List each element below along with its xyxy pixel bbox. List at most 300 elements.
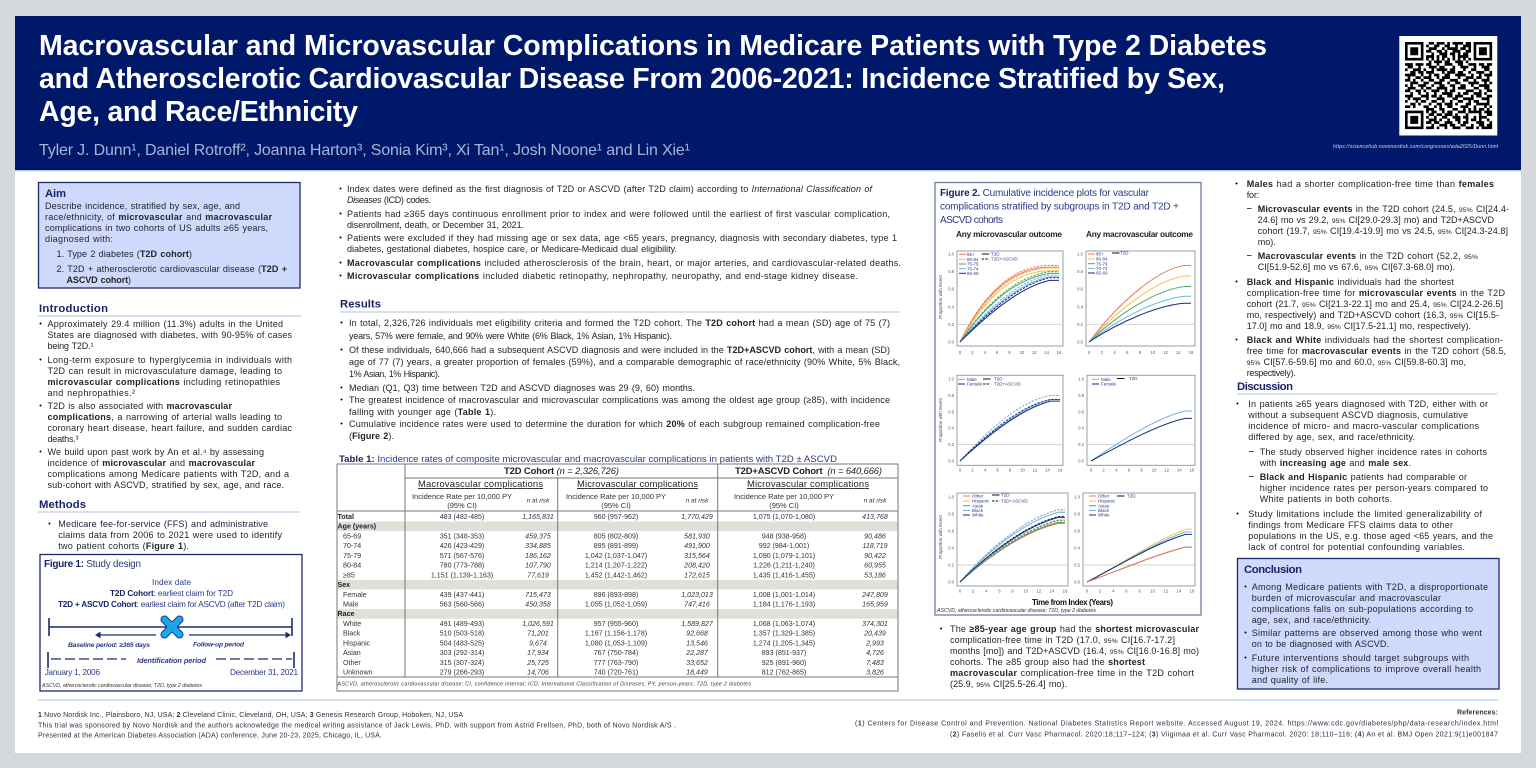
table 1: Microvascular complications — [747, 478, 869, 489]
chart: macrovascular by race: Asian — [1098, 503, 1110, 508]
table 1: T2D+ASCVD Cohort (n = 640,666) — [735, 465, 882, 476]
table 1: 571 (567-576) — [440, 552, 484, 560]
chart: microvascular by race: Hispanic — [972, 499, 990, 504]
timeline — [48, 618, 294, 668]
footer: affiliations and disclosures: 1 Novo Nordisk Inc., Plainsboro, NJ, USA; 2 Cleveland Clinic, Cleveland, OH, USA; 3 Genesis Research Group, Hoboken, NJ, USA — [38, 712, 463, 719]
chart: microvascular by age: 6 — [996, 350, 999, 355]
chart: macrovascular by sex: 0.0 — [1078, 458, 1085, 464]
panel: aim: race/ethnicity, of microvascular and macrovascular — [45, 212, 272, 222]
text block: discussion: Study limitations include the limited generalizability of — [1248, 509, 1482, 519]
table 1: 165,959 — [862, 600, 888, 608]
table 1: 4,726 — [866, 649, 884, 657]
chart: macrovascular by sex: 6 — [1128, 468, 1131, 472]
table 1: 1,090 (1,079-1,101) — [753, 552, 815, 560]
chart: macrovascular by race: 8 — [1138, 588, 1141, 594]
table 1: (95% CI) — [769, 501, 799, 510]
panel: aim: Aim — [45, 188, 66, 200]
chart: macrovascular by race: 6 — [1125, 588, 1128, 594]
title: Age, and Race/Ethnicity — [39, 96, 358, 128]
chart: macrovascular by sex: 14 — [1177, 468, 1182, 472]
chart: microvascular by age: 0.8 — [948, 269, 955, 274]
chart: microvascular by race: 0.8 — [948, 512, 955, 516]
chart: microvascular by sex: 0.6 — [948, 409, 955, 414]
heading: results: Results — [340, 298, 381, 310]
text block: results: Median (Q1, Q3) time between T2D and ASCVD diagnoses was 29 (9, 60) months. — [349, 383, 695, 393]
chart: macrovascular by age: 0.4 — [1077, 304, 1084, 309]
chart: macrovascular by race: 4 — [1112, 588, 1115, 594]
text block: results under figure 2: complication-free time in T2D (17.0, 95% CI[16.7-17.2] — [950, 635, 1175, 645]
text block: introduction: microvascular complications including retinopathies — [48, 377, 280, 387]
text block: introduction: coronary heart disease, heart failure, and sudden cardiac — [48, 423, 292, 433]
table 1: 1,435 (1,416-1,455) — [753, 571, 815, 579]
table 1: ASCVD, atherosclerotic cardiovascular disease; CI, confidence interval; ICD, International Classification of Diseases; PY, person-years; T2D, type 2 diabetes — [336, 682, 751, 688]
panel: figure 2 cumulative incidence: Figure 2. Cumulative incidence plots for vascular — [940, 188, 1150, 199]
chart: microvascular by age: 70-74 — [967, 266, 979, 271]
panel: conclusion: and quality of life. — [1252, 675, 1328, 685]
text block: methods continued: Microvascular complications included diabetic retinopathy, nephropathy, neuropathy, and end-stage kidney disease. — [347, 271, 858, 281]
panel: figure 2 cumulative incidence: complications stratified by subgroups in T2D and T2D + — [940, 202, 1179, 212]
title — [39, 30, 1267, 128]
table 1: 107,790 — [525, 562, 551, 570]
chart: microvascular by race: 2 — [972, 588, 975, 594]
table 1: 75-79 — [343, 552, 361, 560]
chart: microvascular by age: 0.0 — [948, 340, 955, 344]
table 1: 7,483 — [866, 659, 884, 667]
chart: macrovascular by race: 0.0 — [1074, 580, 1081, 584]
chart: microvascular by age: T2D — [991, 252, 1000, 257]
chart: macrovascular by race: Hispanic — [1098, 499, 1116, 504]
table 1: 812 (762-865) — [762, 668, 806, 676]
table 1: 780 (773-788) — [440, 562, 484, 570]
table 1: 491 (489-493) — [440, 620, 484, 628]
chart: macrovascular by age: 6 — [1126, 350, 1129, 355]
chart: microvascular by sex: 14 — [1045, 468, 1050, 472]
panel: aim: complications in two cohorts of US adults ≥65 years, — [45, 223, 268, 233]
text block: discussion: Black and Hispanic patients had comparable or — [1260, 472, 1467, 482]
table 1: 957 (955-960) — [594, 620, 638, 628]
chart: macrovascular by sex: 16 — [1190, 468, 1195, 472]
chart: microvascular by race — [938, 493, 1068, 594]
QR code URL: https://sciencehub.novonordisk.com/congresses/ada2025/Dunn.html — [1333, 144, 1499, 150]
chart: microvascular by age: 0.4 — [948, 304, 955, 309]
x-axis title: Time from Index (Years) — [1032, 598, 1113, 607]
text block: results: In total, 2,326,726 individuals met eligibility criteria and formed the T2D cohort. The T2D cohort had a mean (SD) age of 75 (7) — [349, 318, 890, 328]
table 1: 715,473 — [525, 591, 551, 599]
text block: discussion: lack of control for potential confounding variables. — [1248, 542, 1465, 552]
table 1: 1,055 (1,052-1,059) — [585, 600, 647, 608]
table 1: 450,358 — [525, 600, 551, 608]
text block: introduction: T2D is also associated with macrovascular — [48, 401, 232, 411]
panel: figure 1 study design: ASCVD, atherosclerotic cardiovascular disease; T2D, type 2 diabetes — [41, 683, 202, 689]
table 1: 581,930 — [684, 532, 710, 540]
chart: microvascular by sex: 10 — [1020, 468, 1025, 472]
header banner — [15, 16, 1521, 171]
chart: microvascular by age: 85+ — [967, 252, 975, 257]
chart: macrovascular by sex: 10 — [1152, 468, 1157, 472]
text block: results column 4: respectively). — [1247, 368, 1296, 378]
text block: discussion: The study observed higher incidence rates in cohorts — [1260, 447, 1487, 457]
text block: results: years, 57% were female, and 90% were White (6% Black, 1% Asian, 1% Hispanic). — [349, 331, 672, 341]
panel: conclusion: burden of microvascular and macrovascular — [1252, 593, 1441, 603]
text block: results column 4: complication-free time for microvascular events in the T2D — [1247, 288, 1505, 298]
chart: microvascular by race: 12 — [1036, 588, 1042, 594]
table 1: 1,075 (1,070-1,080) — [753, 513, 815, 521]
chart: macrovascular by sex: 1.0 — [1078, 376, 1085, 382]
footer: affiliations and disclosures: This trial was sponsored by Novo Nordisk and the authors acknowledge the medical writing assistance of Jack Lewis, PhD, with support from Astrid Frellsen, PhD, both of Novo Nordisk A/S . — [38, 722, 676, 730]
chart: macrovascular by sex: 0.8 — [1078, 393, 1085, 398]
footer: references — [855, 710, 1498, 738]
panel: conclusion: Future interventions should target subgroups with — [1252, 653, 1469, 663]
table 1: 1,357 (1,329-1,385) — [753, 630, 815, 638]
chart: macrovascular by sex — [1078, 375, 1195, 472]
text block: introduction: incidence of microvascular and macrovascular — [48, 458, 255, 468]
chart: microvascular by age: 10 — [1020, 350, 1025, 355]
table 1: 118,719 — [862, 542, 888, 550]
table 1: n at risk — [686, 498, 709, 504]
table 1: 90,422 — [864, 552, 886, 560]
panel: figure 2 cumulative incidence: ASCVD cohorts — [940, 215, 1003, 226]
chart: macrovascular by age: 14 — [1176, 350, 1181, 355]
table 1: (95% CI) — [601, 501, 631, 510]
chart: microvascular by age: 75-79 — [967, 262, 979, 267]
table 1: 279 (266-293) — [440, 668, 484, 676]
chart: microvascular by race: Other — [972, 494, 984, 499]
text block: results column 4: Black and Hispanic individuals had the shortest — [1247, 277, 1454, 287]
chart: macrovascular by race: Other — [1098, 494, 1110, 499]
table 1: 18,449 — [686, 668, 708, 676]
table 1: 1,214 (1,207-1,222) — [585, 562, 647, 570]
chart: macrovascular by age: 10 — [1150, 350, 1156, 355]
panel: figure 1 study design: Identification period — [137, 656, 206, 665]
text block: discussion: differed by age, sex, and race/ethnicity. — [1248, 432, 1415, 442]
table 1: Female — [343, 591, 367, 599]
chart: macrovascular by age: 0.2 — [1077, 322, 1084, 327]
table 1: 1,184 (1,176-1,193) — [753, 600, 815, 608]
table 1: 17,934 — [527, 649, 549, 657]
table 1: 948 (938-958) — [762, 532, 806, 540]
table 1: 92,668 — [686, 630, 708, 638]
text block: discussion: higher incidence rates per person-years compared to — [1260, 483, 1488, 493]
chart: microvascular by sex: 12 — [1033, 468, 1038, 472]
panel: figure 1 study design — [40, 554, 302, 691]
chart: microvascular by age: 0 — [959, 350, 962, 355]
chart: macrovascular by sex: 0.6 — [1078, 409, 1085, 414]
chart: microvascular by age — [938, 251, 1063, 355]
text block: results column 4: free time for macrovascular events in the T2D cohort (58.5, — [1247, 346, 1506, 356]
table 1: Age (years) — [338, 523, 377, 531]
text block: results: 1% Asian, 1% Hispanic). — [349, 369, 440, 379]
table 1: Black — [343, 630, 361, 638]
chart: microvascular by sex: T2D — [994, 377, 1003, 382]
table 1: 1,589,827 — [681, 620, 714, 628]
chart: microvascular by age: 12 — [1032, 350, 1037, 355]
chart: macrovascular by age: 1.0 — [1077, 252, 1084, 256]
chart: microvascular by sex: 16 — [1058, 468, 1063, 472]
panel: figure 1 study design: T2D + ASCVD Cohort: earliest claim for ASCVD (after T2D claim) — [58, 600, 285, 609]
chart: microvascular by race: 0.6 — [948, 528, 955, 534]
title: and Atherosclerotic Cardiovascular Disease From 2006-2021: Incidence Stratified by Sex, — [39, 63, 1225, 95]
text block: methods: Medicare fee-for-service (FFS) and administrative — [58, 519, 268, 529]
text block: methods: two patient cohorts (Figure 1). — [58, 541, 189, 551]
table 1: 14,706 — [527, 668, 549, 676]
text block: introduction — [40, 319, 292, 490]
text block: results column 4: cohort (19.7, 95% CI[19.4-19.9] mo vs 24.5, 95% CI[24.3-24.8] — [1258, 226, 1508, 236]
chart: microvascular by sex: 8 — [1009, 468, 1012, 472]
chart: macrovascular by age: 0.6 — [1077, 287, 1084, 292]
table 1: 777 (763-790) — [594, 659, 638, 667]
panel: conclusion: Among Medicare patients with T2D, a disproportionate — [1252, 582, 1488, 592]
panel: conclusion: complications falls on sub-populations according to — [1252, 604, 1473, 614]
text block: discussion: incidence of micro- and macro-vascular complications — [1248, 421, 1479, 431]
table 1: 1,068 (1,063-1,074) — [753, 620, 815, 628]
table 1: 895 (891-899) — [594, 542, 638, 550]
chart: macrovascular by race: 0 — [1086, 588, 1089, 594]
heading: introduction: Introduction — [39, 303, 108, 315]
chart: macrovascular by sex: 4 — [1115, 468, 1118, 472]
chart: macrovascular by age: 0.0 — [1077, 340, 1084, 344]
chart: macrovascular by age: 0 — [1088, 350, 1091, 355]
chart: macrovascular by age: 85+ — [1096, 252, 1104, 257]
text block: results: Of these individuals, 640,666 had a subsequent ASCVD diagnosis and were included in the T2D+ASCVD cohort, with a mean (SD) — [349, 345, 890, 355]
chart: microvascular by age: 0.6 — [948, 287, 955, 292]
table 1: 767 (750-784) — [594, 649, 638, 657]
table 1: 70-74 — [343, 542, 361, 550]
table 1: White — [343, 620, 361, 628]
table 1: 53,186 — [864, 571, 886, 579]
chart: microvascular by race: 0.2 — [948, 562, 955, 568]
chart: microvascular by sex: 4 — [984, 468, 987, 472]
text block: methods continued: Macrovascular complications included atherosclerosis of the brain, heart, or major arteries, and cardiovascular-related deaths. — [347, 258, 901, 268]
chart: microvascular by race: 1.0 — [948, 494, 955, 500]
table 1: 747,416 — [684, 600, 710, 608]
chart: macrovascular by sex: 0 — [1090, 468, 1093, 472]
table 1: 1,042 (1,037-1,047) — [585, 552, 647, 560]
chart: macrovascular by age: T2D — [1120, 251, 1129, 256]
chart: microvascular by age: 80-84 — [967, 257, 979, 262]
table 1: 1,151 (1,139-1,163) — [431, 571, 493, 579]
chart: macrovascular by age: 75-79 — [1096, 261, 1108, 266]
chart: macrovascular by race: White — [1098, 513, 1110, 518]
chart: macrovascular by race: 12 — [1163, 588, 1169, 594]
chart: microvascular by age: 14 — [1044, 350, 1050, 355]
footer: references: (2) Faselis et al. Curr Vasc Pharmacol. 2020:18;117–124; (3) Viigimaa et al. Curr Vasc Pharmacol. 2020: 18;110–116; (4) An et al. BMJ Open 2021:9(1)e001847 — [950, 732, 1498, 738]
text block: introduction: Long-term exposure to hyperglycemia in individuals with — [48, 355, 292, 365]
panel: aim: 2. T2D + atherosclerotic cardiovascular disease (T2D + — [56, 264, 287, 274]
table 1: 960 (957-962) — [594, 513, 638, 521]
heading: discussion: Discussion — [1237, 381, 1293, 393]
text block: results column 4: mo, respectively) and T2D+ASCVD cohort (16.3, 95% CI[15.5- — [1247, 310, 1499, 320]
table 1: 2,993 — [865, 639, 884, 647]
panel: aim: Describe incidence, stratified by sex, age, and — [45, 201, 240, 211]
panel: aim: diagnosed with: — [45, 234, 113, 244]
text block: methods continued: diabetes, gestational diabetes, hospice care, or Medicare-Medicaid dual eligibility. — [347, 244, 677, 254]
text block: results under figure 2: months [mo]) and T2D+ASCVD (16.4, 95% CI[16.0-16.8] mo) — [950, 646, 1199, 656]
chart: macrovascular by age: 80-84 — [1096, 257, 1108, 262]
text block: results column 4 — [1236, 179, 1509, 378]
table 1: 334,885 — [525, 542, 551, 550]
chart: macrovascular by race: Black — [1098, 508, 1110, 513]
panel: conclusion — [1238, 558, 1499, 689]
text block: results: falling with younger age (Table 1). — [349, 407, 496, 417]
text block: discussion: White patients in both cohorts. — [1260, 494, 1392, 504]
panel: figure 2 cumulative incidence: Any microvascular outcome — [956, 229, 1062, 239]
panel: aim: 1. Type 2 diabetes (T2D cohort) — [56, 249, 192, 259]
text block: methods continued: Patients were excluded if they had missing age or sex data, age <65 years, pregnancy, diagnosis with secondary diabetes, type 1 — [347, 233, 897, 243]
chart: microvascular by sex — [938, 375, 1063, 472]
chart: microvascular by age: 8 — [1008, 350, 1011, 355]
table 1: Male — [343, 600, 358, 608]
text block: methods continued: Patients had ≥365 days continuous enrollment prior to index and were followed until the earliest of first vascular complication, — [347, 209, 890, 219]
chart: microvascular by race: 0.4 — [948, 546, 955, 550]
text block: discussion: In patients ≥65 years diagnosed with T2D, either with or — [1248, 399, 1488, 409]
chart: microvascular by sex: 2 — [971, 468, 974, 472]
table 1: Microvascular complications — [577, 478, 698, 489]
table 1: 459,375 — [525, 532, 551, 540]
chart: microvascular by sex: Proportion with Event — [938, 397, 943, 442]
icon: index date cross — [164, 620, 180, 634]
table 1: 491,900 — [684, 542, 710, 550]
chart: microvascular by race: 0.0 — [948, 580, 955, 584]
chart: macrovascular by sex: Female — [1101, 382, 1117, 387]
chart: microvascular by sex: 0.8 — [948, 393, 955, 398]
table 1: 303 (292-314) — [440, 649, 484, 657]
footer: references: (1) Centers for Disease Control and Prevention. National Diabetes Statistics Report website. Accessed August 19, 2024. https://www.cdc.gov/diabetes/php/data-research/index.html — [855, 720, 1498, 728]
chart: macrovascular by race: 0.4 — [1074, 546, 1081, 550]
chart: microvascular by age: 1.0 — [948, 252, 955, 256]
chart: macrovascular by sex: 2 — [1102, 468, 1105, 472]
chart: microvascular by sex: 0.0 — [948, 458, 955, 464]
table 1: 896 (893-898) — [594, 591, 638, 599]
text block: results column 4: Black and White individuals had the shortest complication- — [1247, 335, 1503, 345]
text block: results column 4: Microvascular events in the T2D cohort (24.5, 95% CI[24.4- — [1258, 204, 1509, 214]
table 1: 1,008 (1,001-1,014) — [753, 591, 815, 599]
table 1: 1,770,429 — [681, 513, 713, 521]
table 1: 439 (437-441) — [440, 591, 484, 599]
chart: microvascular by sex: 6 — [996, 468, 999, 472]
panel: figure 1 study design: Figure 1: Study design — [44, 559, 141, 570]
chart: macrovascular by sex: 8 — [1140, 468, 1143, 472]
table 1: 925 (891-960) — [762, 659, 806, 667]
table 1: Unknown — [343, 668, 373, 676]
text block: results — [340, 318, 900, 441]
chart: macrovascular by age: 65-69 — [1096, 271, 1108, 276]
table 1: 33,652 — [686, 659, 708, 667]
chart: microvascular by race: 6 — [998, 588, 1001, 594]
text block: methods continued: disenrollment, death, or December 31, 2021. — [347, 220, 524, 230]
heading: methods: Methods — [39, 499, 86, 511]
footer: references: References: — [1457, 710, 1498, 716]
text block: results column 4: mo). — [1258, 237, 1276, 247]
table 1: 186,162 — [525, 552, 551, 560]
table 1: 1,080 (1,053-1,109) — [585, 639, 647, 647]
chart: macrovascular by sex: Male — [1101, 377, 1111, 382]
table 1: 1,165,831 — [522, 513, 554, 521]
table 1: 426 (423-429) — [440, 542, 484, 550]
text block: introduction: being T2D.¹ — [48, 341, 94, 351]
text block: results column 4: Males had a shorter complication-free time than females — [1247, 179, 1494, 189]
chart: microvascular by race: T2D — [1001, 493, 1010, 498]
text block: introduction: Approximately 29.4 million (11.3%) adults in the United — [48, 319, 283, 329]
table 1: 80-84 — [343, 562, 361, 570]
text block: results column 4: 95% CI[57.6-59.6] mo and 60.0, 95% CI[59.8-60.3] mo, — [1247, 357, 1466, 367]
panel: figure 2 cumulative incidence — [935, 182, 1201, 615]
table 1: Macrovascular complications — [418, 478, 543, 489]
text block: introduction: States are diagnosed with diabetes, with 90-95% of cases — [48, 330, 292, 340]
table 1: Asian — [343, 649, 361, 657]
chart: microvascular by age: 4 — [984, 350, 987, 355]
text block: discussion: with increasing age and male sex. — [1259, 458, 1411, 468]
text block: introduction: We build upon past work by An et al.⁴ by assessing — [48, 447, 264, 457]
chart: microvascular by age: Proportion with Event — [938, 274, 943, 319]
panel: figure 1 study design: January 1, 2006 — [45, 668, 100, 677]
table 1: 740 (720-761) — [594, 668, 638, 676]
table 1: 351 (348-353) — [440, 532, 484, 540]
table 1: ≥85 — [343, 571, 355, 579]
table 1: 60,955 — [864, 562, 886, 570]
table 1: 315,564 — [684, 552, 710, 560]
table 1: 3,826 — [866, 668, 884, 676]
panel: aim: ASCVD cohort) — [66, 275, 131, 285]
table 1: Other — [343, 659, 361, 667]
table 1: T2D Cohort (n = 2,326,726) — [504, 465, 619, 476]
chart: macrovascular by age: 0.8 — [1077, 269, 1084, 274]
text block: results column 4: 17.0] mo and 18.9, 95% CI[17.5-21.1] mo, respectively). — [1247, 321, 1471, 331]
chart: microvascular by race: Asian — [972, 503, 984, 508]
figure 2 footnote: ASCVD, atherosclerotic cardiovascular disease; T2D, type 2 diabetes — [936, 608, 1096, 614]
text block: results: Cumulative incidence rates were used to determine the duration for which 20% of each subgroup remained complication-free — [349, 419, 880, 429]
chart: microvascular by age: 65-69 — [967, 271, 979, 276]
table 1: 483 (482-485) — [440, 513, 484, 521]
chart: macrovascular by age — [1077, 251, 1195, 355]
chart: macrovascular by race: 16 — [1190, 588, 1195, 594]
table 1: 90,486 — [864, 532, 886, 540]
chart: macrovascular by age: 16 — [1189, 350, 1194, 355]
chart: macrovascular by race: 0.6 — [1074, 528, 1081, 534]
table 1: Incidence Rate per 10,000 PY — [566, 492, 666, 501]
table 1: 893 (851-937) — [762, 649, 806, 657]
table 1: 1,023,013 — [681, 591, 713, 599]
table 1: 25,725 — [526, 659, 549, 667]
chart: microvascular by race: 4 — [985, 588, 988, 594]
text block: methods continued — [340, 184, 901, 281]
chart: macrovascular by race: 2 — [1099, 588, 1102, 594]
chart: macrovascular by race: 1.0 — [1074, 494, 1081, 500]
table 1: Race — [338, 610, 355, 618]
text block: results under figure 2: The ≥85-year age group had the shortest microvascular — [950, 624, 1199, 634]
table 1: 13,546 — [686, 639, 708, 647]
chart: macrovascular by race: 10 — [1150, 588, 1156, 594]
text block: introduction: sub-cohort with ASCVD, stratified by sex, age, and race. — [48, 480, 284, 490]
table 1: n at risk — [527, 498, 550, 504]
chart: microvascular by race: 10 — [1023, 588, 1029, 594]
table 1: 992 (984-1,001) — [759, 542, 809, 550]
chart: microvascular by sex: 0.4 — [948, 426, 955, 431]
table 1: 247,809 — [861, 591, 888, 599]
chart: macrovascular by age: 2 — [1101, 350, 1104, 355]
footer: affiliations and disclosures — [38, 712, 676, 740]
text block: results column 4: for: — [1247, 190, 1259, 200]
text block: results column 4: 24.6] mo vs 29.2, 95% CI[29.0-29.3] mo) and T2D+ASCVD — [1258, 215, 1494, 225]
chart: macrovascular by age: 12 — [1163, 350, 1168, 355]
chart: microvascular by age: 16 — [1057, 350, 1062, 355]
panel: aim — [38, 182, 300, 288]
panel: conclusion: on to be diagnosed with ASCVD. — [1252, 639, 1389, 649]
text block: discussion: findings from Medicare FFS claims data to other — [1248, 520, 1453, 530]
table 1: Total — [338, 513, 354, 521]
text block: results column 4: cohort (21.7, 95% CI[21.3-22.1] mo and 25.4, 95% CI[24.2-26.5] — [1247, 299, 1503, 309]
text block: discussion: populations in the US, e.g. those aged <65 years, and the — [1248, 531, 1493, 541]
table 1: 77,619 — [527, 571, 549, 579]
